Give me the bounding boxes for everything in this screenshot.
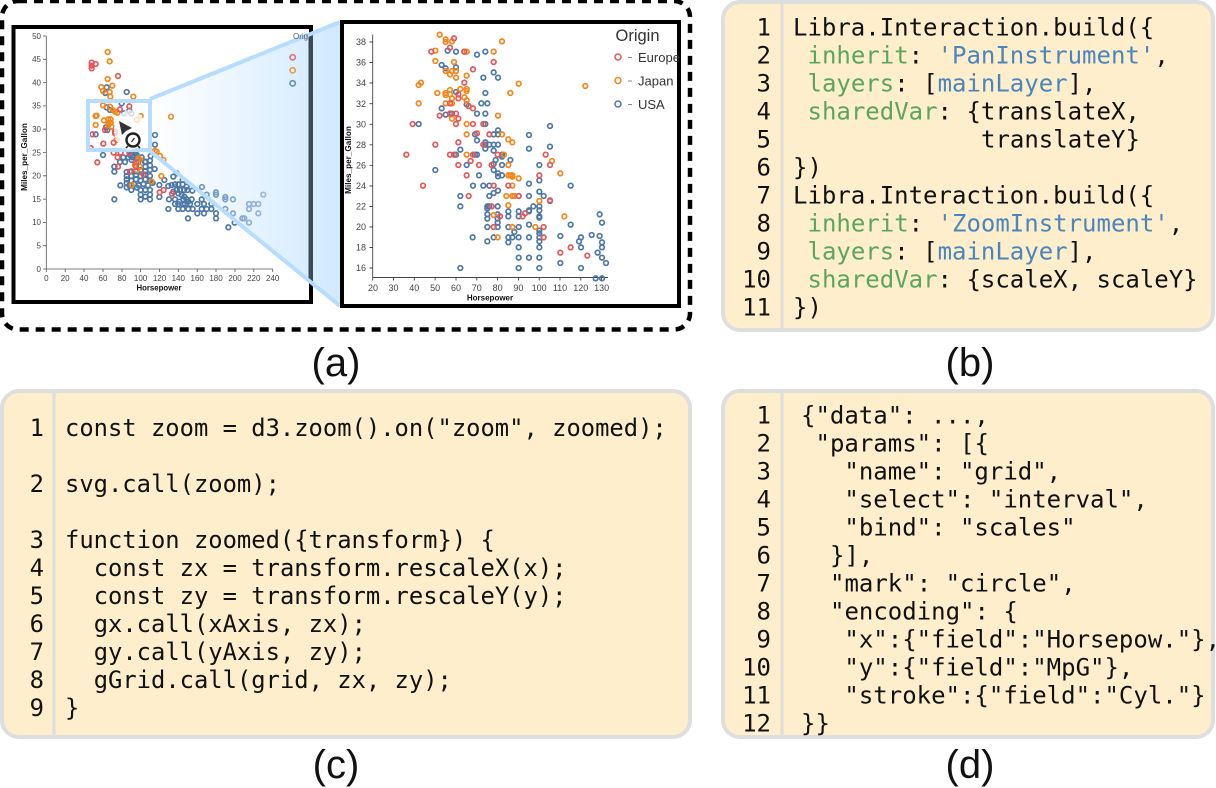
overview scatterplot: 30 <box>32 125 42 134</box>
overview chart frame <box>14 27 311 302</box>
zoomed scatterplot: Miles_per_Gallon <box>344 126 353 194</box>
panel: (b) Libra code: 8 <box>757 210 771 238</box>
panel: (b) Libra code: }) <box>793 154 822 182</box>
faded legend of overview chart <box>290 32 308 86</box>
faded legend of overview chart: Orig <box>293 32 308 41</box>
zoomed scatterplot: 18 <box>356 243 366 253</box>
panel: (c) D3 code: function zoomed({transform}) { <box>65 526 495 554</box>
zoomed scatterplot: 30 <box>356 120 366 130</box>
panel: (b) Libra code: }) <box>793 294 822 322</box>
zoomed scatterplot: 70 <box>472 283 482 293</box>
overview scatterplot: 5 <box>37 242 42 250</box>
panel: (d) Vega-Lite spec: {"data": ..., <box>801 402 989 430</box>
zoomed scatterplot: 38 <box>356 37 366 47</box>
overview scatterplot: 240 <box>266 274 280 283</box>
panel: (b) Libra code: inherit: 'ZoomInstrument', <box>808 210 1183 238</box>
zoomed scatterplot: 110 <box>553 283 567 293</box>
panel: (d) Vega-Lite spec: 6 <box>757 542 771 570</box>
panel: (c) D3 code: } <box>65 694 79 722</box>
overview scatterplot: 120 <box>153 274 167 283</box>
overview scatterplot <box>20 32 280 293</box>
zoomed scatterplot: 36 <box>356 58 366 68</box>
overview scatterplot: 220 <box>247 274 261 283</box>
zoomed scatterplot: 16 <box>356 263 366 273</box>
overview scatterplot: 0 <box>44 274 49 283</box>
panel: (b) Libra code: 6 <box>757 154 771 182</box>
zoomed scatterplot: 34 <box>356 78 366 88</box>
panel: (b) Libra code: translateY} <box>981 126 1140 154</box>
overview scatterplot: 20 <box>32 172 42 181</box>
panel: (d) Vega-Lite spec: "mark": "circle", <box>830 570 1076 598</box>
caption (a): (a) <box>312 341 360 385</box>
overview scatterplot: 140 <box>172 274 186 283</box>
panel: (b) Libra code: 4 <box>757 98 771 126</box>
panel: (d) Vega-Lite spec: 2 <box>757 430 771 458</box>
zoomed scatterplot: 120 <box>573 283 588 293</box>
panel: (d) Vega-Lite spec: 12 <box>742 710 771 738</box>
panel: (b) Libra code <box>723 2 1213 330</box>
zoomed scatterplot: Horsepower <box>467 294 513 302</box>
overview scatterplot: 200 <box>228 274 242 283</box>
overview scatterplot: 0 <box>37 265 42 274</box>
panel: (d) Vega-Lite spec: "stroke":{"field":"Cyl."} <box>844 682 1206 710</box>
panel: (b) Libra code: sharedVar: {scaleX, scaleY} <box>808 266 1198 294</box>
panel: (c) D3 code: 3 <box>30 526 44 554</box>
icon: cursor with zoom magnifier <box>114 110 146 150</box>
panel: (c) D3 code: 9 <box>30 694 44 722</box>
panel: (d) Vega-Lite spec: }], <box>830 542 873 570</box>
panel: (b) Libra code: layers: [mainLayer], <box>808 70 1097 98</box>
panel: (d) Vega-Lite spec: 7 <box>757 570 771 598</box>
zoomed scatterplot: 20 <box>368 283 378 293</box>
overview scatterplot: 35 <box>32 102 42 111</box>
panel: (c) D3 code: const zy = transform.rescaleY(y); <box>94 582 566 610</box>
panel: (d) Vega-Lite spec: 8 <box>757 598 771 626</box>
overview scatterplot: Horsepower <box>136 284 182 292</box>
zoomed chart frame <box>342 22 679 306</box>
caption (d): (d) <box>946 743 994 787</box>
zoomed scatterplot: 30 <box>388 283 399 293</box>
panel: (c) D3 code: gGrid.call(grid, zx, zy); <box>94 666 452 694</box>
panel: (d) Vega-Lite spec: "params": [{ <box>816 430 989 458</box>
panel: (b) Libra code: 11 <box>742 294 771 322</box>
caption (b): (b) <box>946 341 994 385</box>
zoom projection wedge <box>150 22 340 306</box>
panel: (c) D3 code <box>2 391 690 737</box>
zoomed scatterplot: 26 <box>356 160 366 170</box>
overview scatterplot: 40 <box>80 274 89 283</box>
zoomed scatterplot: 60 <box>451 283 461 293</box>
panel: (c) D3 code: 6 <box>30 610 44 638</box>
zoomed scatterplot: 50 <box>430 283 440 293</box>
zoomed scatterplot: 100 <box>532 283 547 293</box>
panel: (b) Libra code: inherit: 'PanInstrument', <box>808 42 1169 70</box>
panel: (d) Vega-Lite spec: 9 <box>757 626 771 654</box>
zoomed scatterplot: 24 <box>356 181 366 191</box>
overview scatterplot: 25 <box>32 148 42 157</box>
overview scatterplot: 100 <box>134 274 148 283</box>
panel: (b) Libra code: 3 <box>757 70 771 98</box>
panel: (d) Vega-Lite spec: 11 <box>742 682 771 710</box>
overview scatterplot: 10 <box>32 218 42 227</box>
panel: (d) Vega-Lite spec: 3 <box>757 458 771 486</box>
overview scatterplot: 45 <box>32 55 42 64</box>
panel: (d) Vega-Lite spec: "x":{"field":"Horsepow."}, <box>844 626 1216 654</box>
panel: (b) Libra code: Libra.Interaction.build({ <box>793 182 1154 210</box>
panel: (d) Vega-Lite spec: 1 <box>757 402 771 430</box>
panel: (d) Vega-Lite spec: "bind": "scales" <box>844 514 1076 542</box>
panel: (c) D3 code: 7 <box>30 638 44 666</box>
panel: (b) Libra code: sharedVar: {translateX, <box>808 98 1140 126</box>
panel: (c) D3 code: svg.call(zoom); <box>65 470 280 498</box>
panel: (c) D3 code: 4 <box>30 554 44 582</box>
legend: Origin: Japan <box>638 74 673 88</box>
overview scatterplot: 180 <box>209 274 223 283</box>
zoomed scatterplot: 28 <box>356 140 366 150</box>
caption (c): (c) <box>313 743 359 787</box>
zoomed scatterplot: 20 <box>356 222 366 232</box>
zoomed scatterplot: 22 <box>356 202 366 212</box>
panel: (d) Vega-Lite spec <box>723 391 1216 738</box>
panel: (c) D3 code: 5 <box>30 582 44 610</box>
zoomed scatterplot: 130 <box>594 283 609 293</box>
panel: (b) Libra code: 2 <box>757 42 771 70</box>
panel: (b) Libra code: 9 <box>757 238 771 266</box>
overview scatterplot: 20 <box>61 274 70 283</box>
panel: (c) D3 code: 2 <box>30 470 44 498</box>
legend: Origin: USA <box>638 97 665 112</box>
panel: (d) Vega-Lite spec: "y":{"field":"MpG"}, <box>844 654 1133 682</box>
legend: Origin: Europe <box>638 50 680 65</box>
zoomed scatterplot: 80 <box>493 283 503 293</box>
legend: Origin <box>615 27 680 112</box>
panel: (c) D3 code: const zx = transform.rescaleX(x); <box>94 554 566 582</box>
panel: (d) Vega-Lite spec: "encoding": { <box>830 598 1018 626</box>
overview scatterplot: 60 <box>99 274 108 283</box>
zoomed scatterplot: 32 <box>356 99 366 109</box>
panel: (d) Vega-Lite spec: "name": "grid", <box>844 458 1061 486</box>
panel: (c) D3 code: gx.call(xAxis, zx); <box>94 610 366 638</box>
overview scatterplot: 50 <box>32 32 42 41</box>
panel: (d) Vega-Lite spec: "select": "interval", <box>844 486 1148 514</box>
panel: (d) Vega-Lite spec: 10 <box>742 654 771 682</box>
panel: (b) Libra code: 10 <box>742 266 771 294</box>
panel: (b) Libra code: 7 <box>757 182 771 210</box>
panel: (c) D3 code: 8 <box>30 666 44 694</box>
panel: (b) Libra code: 1 <box>757 14 771 42</box>
panel: (d) Vega-Lite spec: }} <box>801 710 830 738</box>
zoomed scatterplot: 90 <box>513 283 523 293</box>
panel: (c) D3 code: 1 <box>30 414 44 442</box>
panel: (b) Libra code: 5 <box>757 126 771 154</box>
zoomed scatterplot: 40 <box>409 283 419 293</box>
overview scatterplot: 40 <box>32 78 42 87</box>
panel: (c) D3 code: gy.call(yAxis, zy); <box>94 638 366 666</box>
legend: Origin: Origin <box>616 27 660 45</box>
panel: (c) D3 code: const zoom = d3.zoom().on("zoom", zoomed); <box>65 414 667 442</box>
panel: (b) Libra code: layers: [mainLayer], <box>808 238 1097 266</box>
selection rectangle <box>88 101 150 150</box>
overview scatterplot: 160 <box>191 274 204 283</box>
panel: (d) Vega-Lite spec: 5 <box>757 514 771 542</box>
zoomed scatterplot <box>344 32 609 303</box>
overview scatterplot: Miles_per_Gallon <box>20 123 29 191</box>
panel: (d) Vega-Lite spec: 4 <box>757 486 771 514</box>
overview scatterplot: 80 <box>118 274 127 283</box>
panel: (b) Libra code: Libra.Interaction.build({ <box>793 14 1154 42</box>
overview scatterplot: 15 <box>32 195 42 204</box>
